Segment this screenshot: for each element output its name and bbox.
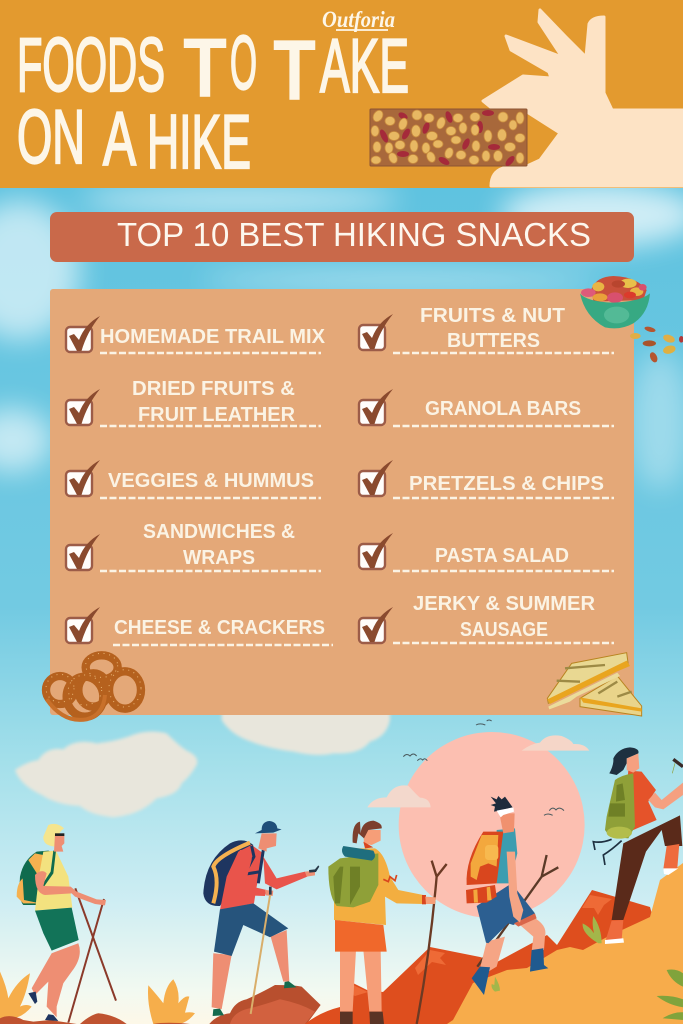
- orange plant left: [0, 972, 32, 1018]
- title: Foods to take on a hike: FOODS: [17, 23, 165, 108]
- icon: trail mix bowl: [580, 276, 683, 364]
- item: dried fruits and fruit leather: [66, 378, 321, 426]
- large rock: [209, 985, 321, 1024]
- sandy slope: [447, 863, 683, 1024]
- item: fruits and nut butters: [359, 305, 614, 353]
- item: homemade trail mix: [66, 316, 326, 353]
- title: Foods to take on a hike: HIKE: [147, 100, 251, 185]
- item: fruits and nut butters: FRUITS & NUT: [420, 305, 565, 327]
- banner: top 10 best hiking snacks: [50, 212, 634, 262]
- logo: Outforia: Outforia: [322, 7, 395, 32]
- panel: snack checklist: [50, 289, 634, 715]
- item: sandwiches and wraps: SANDWICHES &: [143, 521, 295, 543]
- item: veggies and hummus: [66, 460, 321, 498]
- banner: top 10 best hiking snacks: TOP 10 BEST HIKING SNACKS: [117, 216, 591, 253]
- item: fruits and nut butters: BUTTERS: [447, 330, 540, 352]
- item: homemade trail mix: HOMEMADE TRAIL MIX: [100, 326, 326, 348]
- item: pretzels and chips: PRETZELS & CHIPS: [409, 473, 604, 495]
- mountains and ground: [0, 972, 321, 1024]
- title: Foods to take on a hike: O: [230, 21, 257, 106]
- item: dried fruits and fruit leather: FRUIT LEATHER: [138, 404, 296, 426]
- item: dried fruits and fruit leather: DRIED FRUITS &: [132, 378, 295, 400]
- hiker 2: [203, 821, 319, 1016]
- birds: [403, 720, 564, 815]
- item: jerky and summer sausage: JERKY & SUMMER: [413, 593, 596, 615]
- icon: pretzels: [46, 653, 141, 720]
- item: jerky and summer sausage: [359, 593, 614, 643]
- cloud: centre under panel: [222, 710, 390, 755]
- title: Foods to take on a hike: T: [273, 23, 316, 119]
- hiker 1: [17, 824, 116, 1023]
- hiker 5: [593, 747, 683, 944]
- item: cheese and crackers: CHEESE & CRACKERS: [114, 617, 325, 639]
- hiker 3: [328, 821, 447, 1024]
- item: pasta salad: [359, 533, 614, 571]
- small cloud left of sun: [367, 785, 431, 807]
- small rocks: [0, 1013, 190, 1024]
- item: sandwiches and wraps: [66, 521, 321, 571]
- cloud: large left: [15, 731, 197, 817]
- item: pretzels and chips: [359, 460, 614, 498]
- plants on slope: [491, 916, 683, 1020]
- title: Foods to take on a hike: AKE: [320, 24, 409, 109]
- title: Foods to take on a hike: ON: [17, 95, 85, 180]
- item: pasta salad: PASTA SALAD: [435, 545, 569, 567]
- leaves right: [657, 970, 683, 1020]
- icon: grilled sandwich: [547, 653, 642, 716]
- title: Foods to take on a hike: [17, 21, 409, 185]
- title: Foods to take on a hike: T: [183, 21, 227, 115]
- item: sandwiches and wraps: WRAPS: [183, 547, 255, 569]
- orange plant centre: [148, 979, 195, 1024]
- title: Foods to take on a hike: A: [103, 97, 136, 182]
- poles: [68, 888, 116, 1023]
- item: cheese and crackers: [66, 607, 333, 645]
- item: veggies and hummus: VEGGIES & HUMMUS: [108, 470, 314, 492]
- item: jerky and summer sausage: SAUSAGE: [460, 619, 548, 641]
- nuts: [630, 326, 683, 364]
- mountain highlights: [347, 895, 612, 996]
- icon: hand: [483, 10, 683, 186]
- icon: granola bar: [370, 109, 527, 168]
- small cloud top right of sun: [522, 735, 589, 751]
- hiker 4: [466, 796, 558, 995]
- item: granola bars: GRANOLA BARS: [425, 398, 581, 420]
- sun with clouds and birds: [367, 720, 589, 918]
- item: granola bars: [359, 389, 614, 426]
- red mountain: [305, 890, 655, 1024]
- header band: [0, 0, 683, 188]
